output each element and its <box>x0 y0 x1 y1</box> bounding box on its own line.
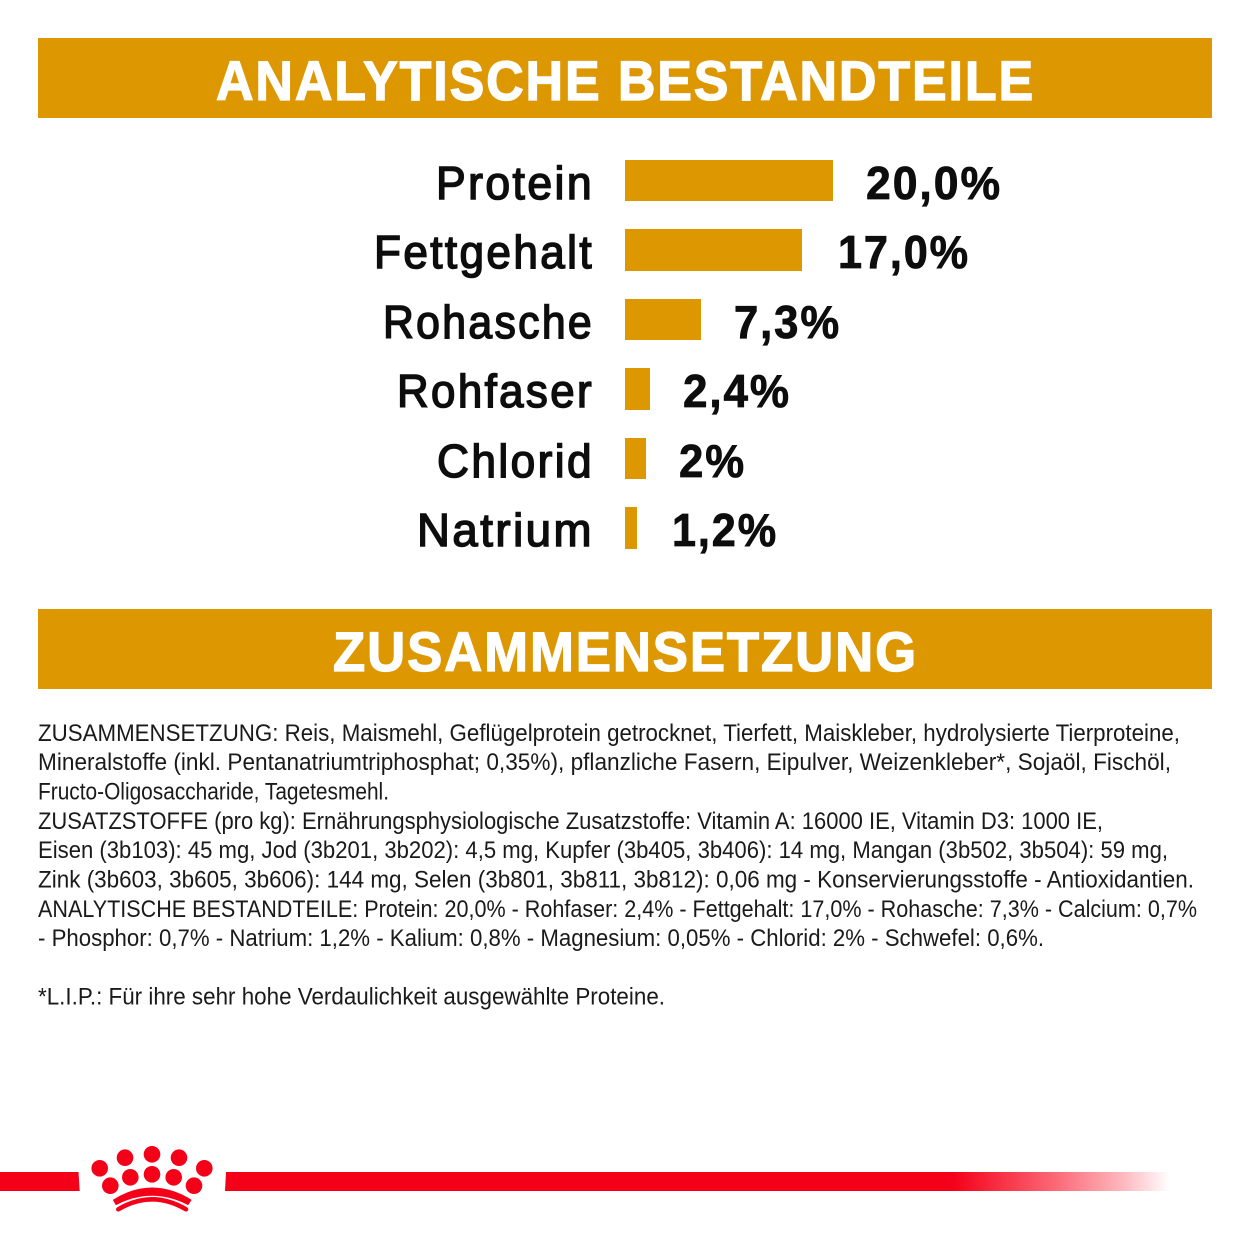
heading: zusammensetzung: ZUSAMMENSETZUNG <box>333 620 918 683</box>
row: Rohfaser: 2,4% <box>683 365 791 417</box>
footnote: *L.I.P.: Für ihre sehr hohe Verdaulichkeit ausgewählte Proteine. <box>38 984 665 1010</box>
row: Protein: Protein <box>436 157 594 209</box>
row: Rohasche: Rohasche <box>383 296 594 348</box>
row: Chlorid <box>437 435 746 487</box>
row: Fettgehalt: 17,0% <box>838 226 970 278</box>
row: Rohfaser: Rohfaser <box>397 365 594 417</box>
row: Fettgehalt: Fettgehalt <box>374 226 594 278</box>
row: Natrium: Natrium <box>417 504 594 556</box>
row: Rohfaser <box>397 365 791 417</box>
heading: analytische bestandteile: ANALYTISCHE BESTANDTEILE <box>216 49 1035 112</box>
row: Natrium <box>417 504 778 556</box>
row: Protein: 20,0% <box>866 157 1002 209</box>
text block: composition: Fructo-Oligosaccharide, Tagetesmehl. <box>38 778 389 806</box>
row: Chlorid: 2% <box>679 435 746 487</box>
heading: analytische bestandteile <box>38 38 1212 118</box>
row: Fettgehalt <box>374 226 970 278</box>
text block: composition <box>38 720 1197 952</box>
row: Chlorid: Chlorid <box>437 435 594 487</box>
icon: royal canin crown logo <box>91 1146 213 1209</box>
red line: right segment with fade <box>225 1172 1170 1191</box>
red line: left segment <box>0 1172 80 1191</box>
row: Rohasche <box>383 296 841 348</box>
row: Rohasche: 7,3% <box>734 296 841 348</box>
text block: composition: - Phosphor: 0,7% - Natrium: 1,2% - Kalium: 0,8% - Magnesium: 0,05% - Chlorid: 2% - Schwefel: 0,6%. <box>38 925 1044 952</box>
row: Protein <box>436 157 1002 209</box>
heading: zusammensetzung <box>38 609 1212 689</box>
bar chart: analytical constituents <box>374 157 1002 556</box>
row: Natrium: 1,2% <box>672 504 778 556</box>
text block: composition: ZUSATZSTOFFE (pro kg): Ernährungsphysiologische Zusatzstoffe: Vitamin A: 16000 IE, Vitamin D3: 1000 IE, <box>38 808 1103 835</box>
text block: composition: Mineralstoffe (inkl. Pentanatriumtriphosphat; 0,35%), pflanzliche Fasern, Eipulver, Weizenkleber*, Sojaöl, Fischöl, <box>38 749 1171 776</box>
